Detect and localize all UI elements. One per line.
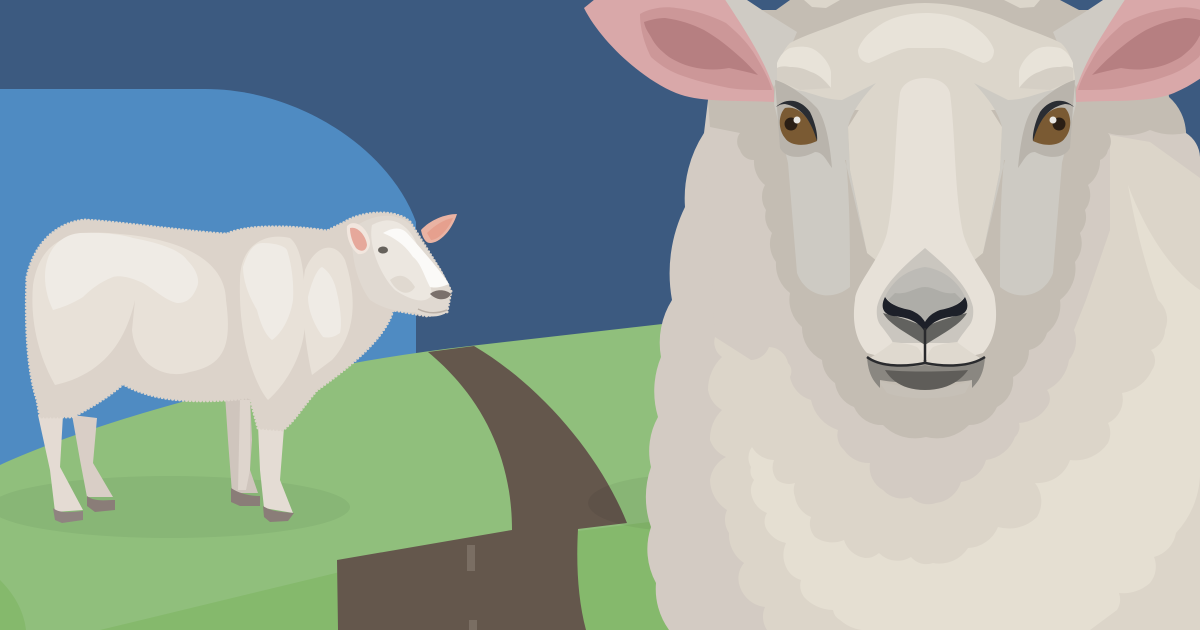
eyelid <box>776 101 817 141</box>
road dashes <box>467 545 477 630</box>
brow lower tone <box>777 65 831 90</box>
ear: left <box>584 0 797 102</box>
cheek shadow <box>390 276 415 293</box>
nose <box>430 290 451 299</box>
near ear inner <box>350 228 367 251</box>
far legs <box>72 395 260 512</box>
wool lobe: neck <box>303 248 353 375</box>
chin shadow <box>867 357 985 388</box>
pupil <box>784 118 798 130</box>
hill: light green <box>0 322 680 630</box>
forehead highlight <box>858 13 994 63</box>
face white blaze <box>383 228 449 288</box>
small sheep <box>26 213 457 523</box>
mouth line <box>867 328 985 365</box>
eye shadow <box>775 80 832 168</box>
near ear <box>347 223 370 254</box>
wool: face ring dark <box>708 10 1186 438</box>
head <box>352 216 451 316</box>
grey cheek patch <box>774 80 876 295</box>
nose surround <box>877 248 973 343</box>
wool highlight: rump <box>45 233 198 310</box>
wool body <box>26 213 451 430</box>
shadow: small sheep <box>0 476 350 538</box>
eye iris <box>780 108 817 145</box>
dark band: left of muzzle <box>845 160 1005 300</box>
ear: right <box>1053 0 1200 102</box>
wool: top band between ears <box>750 0 1100 100</box>
panel: rounded blue sky shape <box>0 89 416 480</box>
wool: middle layer <box>708 135 1200 630</box>
face lighter cheek <box>371 220 432 300</box>
wool lobe: shoulder <box>240 237 305 400</box>
large sheep <box>584 0 1200 630</box>
wool: inner ring <box>704 133 1110 504</box>
wool highlight: shoulder <box>243 243 293 340</box>
brow highlight <box>777 47 831 88</box>
centre stripe <box>848 70 1002 300</box>
wool highlight: neck <box>308 267 341 338</box>
wool: collar mid ring <box>752 185 1167 564</box>
wool: outer layer <box>646 100 1200 630</box>
nose top <box>885 267 965 330</box>
eye <box>378 246 388 254</box>
chin light <box>878 380 972 398</box>
highlight <box>794 116 800 124</box>
muzzle lobes <box>870 342 980 367</box>
near legs <box>38 415 294 523</box>
wool: top tufts <box>804 0 1040 8</box>
shadow: large sheep on road and grass <box>588 475 772 531</box>
road <box>337 346 627 630</box>
nose stripe <box>854 78 996 360</box>
head top <box>777 3 1075 110</box>
nose: black nostrils <box>883 297 967 332</box>
far ear <box>421 214 457 243</box>
wool: light front layer <box>748 185 1200 630</box>
nose: lower grey <box>883 313 967 345</box>
mouth <box>418 309 447 313</box>
left eye region <box>774 47 876 295</box>
right eye region <box>974 47 1076 295</box>
wool lobe: rump <box>32 233 228 385</box>
nose centre <box>888 287 962 330</box>
hill: darker foreground <box>0 518 680 630</box>
chin dark <box>885 370 968 390</box>
